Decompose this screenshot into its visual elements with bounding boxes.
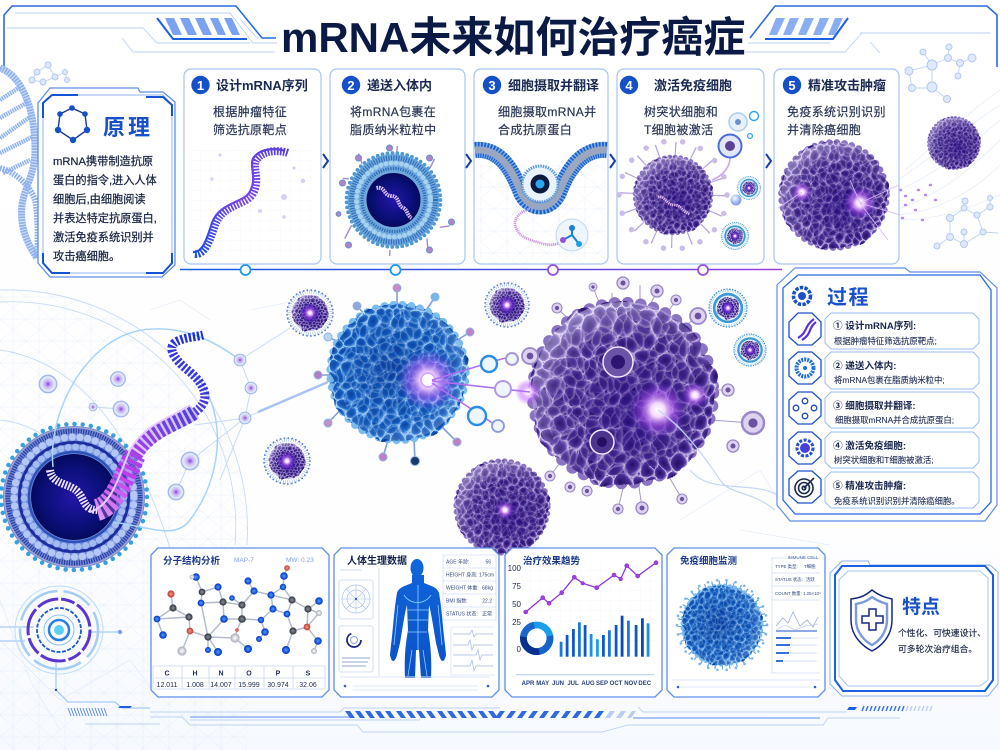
element table: 14.007 bbox=[210, 682, 232, 689]
text: principle description: mRNA携带制造抗原 bbox=[53, 154, 153, 168]
element table: 1.008 bbox=[186, 682, 204, 689]
text: principle description: 攻击癌细胞。 bbox=[53, 249, 120, 263]
target radar bbox=[0, 586, 150, 708]
molecule bbox=[154, 565, 323, 656]
element table: 32.06 bbox=[299, 682, 317, 689]
y axis labels: 50 bbox=[512, 600, 522, 609]
arrow bbox=[466, 154, 471, 168]
text: principle description: 并表达特定抗原蛋白, bbox=[53, 211, 157, 225]
human body figure bbox=[390, 559, 446, 678]
icon: cell membrane uptake bbox=[475, 150, 607, 251]
header frame right bbox=[745, 6, 997, 67]
step card 4 bbox=[617, 69, 764, 264]
step description: 细胞摄取mRNA并 bbox=[498, 104, 596, 119]
step description bbox=[498, 104, 596, 137]
month labels: APR bbox=[522, 681, 535, 687]
panel meta: MW: 0.23 bbox=[286, 557, 314, 564]
panel: features bbox=[830, 561, 998, 696]
heading: features: 特点 bbox=[902, 596, 940, 618]
line chart bbox=[524, 561, 658, 614]
text: principle description: 蛋白的指令,进入人体 bbox=[53, 173, 157, 187]
step description bbox=[213, 104, 287, 137]
blue immune cell bbox=[677, 580, 767, 670]
stats table: BMI 指数: bbox=[446, 598, 468, 604]
badge 4 bbox=[620, 76, 638, 94]
step heading: 设计mRNA序列 bbox=[216, 78, 308, 93]
month labels: SEP bbox=[596, 681, 608, 687]
title: mRNA未来如何治疗癌症 bbox=[281, 14, 745, 61]
panel: treatment trend bbox=[505, 548, 662, 697]
process row 5: ⑤ 精准攻击肿瘤: bbox=[833, 480, 906, 492]
stats table: WEIGHT 体重: bbox=[446, 584, 479, 592]
step heading: 细胞摄取并翻译 bbox=[508, 78, 599, 93]
month labels: JUL bbox=[567, 681, 579, 687]
big blue cell with spikes bbox=[314, 284, 530, 466]
step heading: 精准攻击肿瘤 bbox=[808, 78, 886, 93]
step description: 并清除癌细胞 bbox=[787, 122, 861, 137]
ecg box bbox=[451, 627, 495, 675]
big purple cancer cell bbox=[515, 277, 778, 514]
background lattice sphere bbox=[0, 290, 830, 750]
panel meta bbox=[234, 557, 314, 564]
month labels: AUG bbox=[581, 681, 595, 687]
footer tech lines bbox=[68, 706, 932, 732]
step description: 免疫系统识别识别 bbox=[787, 104, 886, 119]
text: features description: 可多轮次治疗组合。 bbox=[898, 643, 977, 654]
y axis labels bbox=[508, 564, 522, 654]
icon: dendritic cell bbox=[619, 141, 730, 249]
y axis labels: 0 bbox=[517, 645, 522, 654]
immune data table: COUNT 数量: bbox=[775, 590, 802, 597]
step description: 脂质纳米粒粒中 bbox=[350, 122, 436, 137]
stats table: 68kg bbox=[482, 586, 493, 592]
network dots bbox=[210, 153, 305, 219]
process row 3: 细胞摄取mRNA并合成抗原蛋白; bbox=[835, 415, 954, 425]
process row 2: 将mRNA包裹在脂质纳米粒中; bbox=[834, 375, 945, 385]
element table: C bbox=[164, 670, 170, 678]
immune data table bbox=[772, 555, 821, 673]
process row 2: ② 递送入体内: bbox=[833, 360, 896, 372]
icon: cancer cell under attack bbox=[778, 142, 900, 248]
process row 5 bbox=[789, 471, 979, 508]
process row 3: ③ 细胞摄取并翻译: bbox=[833, 400, 916, 412]
y axis labels: 25 bbox=[512, 618, 522, 627]
element table: P bbox=[276, 670, 281, 678]
element table: 12.011 bbox=[157, 682, 178, 689]
small virus cells bbox=[264, 283, 766, 484]
stats table: 正常 bbox=[482, 610, 492, 618]
badge 3 bbox=[483, 76, 501, 94]
stats table: HEIGHT 身高: bbox=[446, 572, 478, 578]
top left molecule bbox=[29, 62, 70, 85]
element table bbox=[153, 666, 325, 689]
panel: process bbox=[777, 268, 997, 521]
radar box bbox=[339, 568, 379, 676]
process row 1 bbox=[789, 313, 979, 349]
step card 5 bbox=[774, 69, 900, 264]
element table: 30.974 bbox=[267, 682, 289, 689]
step heading: 递送入体内 bbox=[367, 78, 432, 93]
attack beams bbox=[432, 358, 530, 428]
step description bbox=[350, 104, 436, 137]
icon: hexagon molecule bbox=[55, 105, 90, 143]
process row 1: 根据肿瘤特征筛选抗原靶点; bbox=[834, 336, 937, 346]
satellite immune cells bbox=[718, 112, 760, 250]
axis line bbox=[516, 674, 654, 676]
panel: principle bbox=[38, 88, 175, 277]
month labels: OCT bbox=[610, 681, 623, 687]
immune data table: IMMUNE CELL bbox=[788, 555, 819, 560]
timeline bbox=[180, 265, 782, 275]
badge 4: 4 bbox=[625, 78, 633, 93]
step description: 合成抗原蛋白 bbox=[498, 122, 572, 137]
badge 5: 5 bbox=[788, 78, 796, 93]
purple cell lower bbox=[455, 460, 549, 554]
heading: principle: 原理 bbox=[103, 115, 153, 140]
month labels: DEC bbox=[638, 681, 652, 687]
right molecules and strands bbox=[880, 44, 1000, 249]
arrow bbox=[323, 154, 328, 168]
network lines centre bbox=[93, 328, 328, 492]
gauge box bbox=[339, 626, 373, 672]
y axis labels: 100 bbox=[508, 564, 522, 573]
step description: T细胞被激活 bbox=[644, 123, 713, 137]
process row 5: 免疫系统识别识别并清除癌细胞。 bbox=[834, 496, 960, 506]
element table: S bbox=[306, 670, 311, 678]
text: principle description: 细胞后,由细胞阅读 bbox=[53, 192, 146, 206]
text: features description bbox=[898, 627, 986, 654]
month labels: MAY bbox=[536, 681, 549, 687]
element table: H bbox=[192, 670, 198, 678]
badge 5 bbox=[783, 76, 801, 94]
text: principle description: 激活免疫系统识别并 bbox=[53, 230, 154, 244]
purple satellites bbox=[522, 277, 764, 514]
lipid nanoparticle with mrna bbox=[1, 424, 147, 570]
immune data table: T细胞 bbox=[804, 563, 816, 570]
text: principle description bbox=[53, 154, 157, 263]
icon: gear bbox=[794, 288, 810, 304]
arrow bbox=[766, 154, 771, 168]
immune data table: STATUS 状态: bbox=[775, 576, 803, 582]
step description: 树突状细胞和 bbox=[644, 104, 718, 119]
badge 2: 2 bbox=[347, 78, 355, 93]
step description bbox=[787, 104, 886, 137]
donut chart bbox=[523, 625, 550, 652]
immune data table: TYPE 类型: bbox=[775, 563, 798, 570]
badge 2 bbox=[342, 76, 360, 94]
panel: molecular analysis bbox=[151, 548, 329, 697]
badge 1: 1 bbox=[197, 78, 204, 93]
text: features description: 个性化、可快速设计、 bbox=[898, 627, 986, 638]
element table: O bbox=[246, 670, 252, 678]
panel: body data bbox=[334, 548, 499, 697]
panel meta: MAP-7 bbox=[234, 557, 254, 564]
step heading: 激活免疫细胞 bbox=[654, 78, 732, 93]
heading: process: 过程 bbox=[827, 286, 870, 309]
step description: 根据肿瘤特征 bbox=[213, 104, 287, 119]
stats table: STATUS 状态: bbox=[446, 610, 478, 618]
panel heading: 人体生理数据 bbox=[347, 554, 407, 567]
process row 3 bbox=[789, 392, 979, 428]
network nodes bbox=[39, 354, 257, 500]
process row 2 bbox=[789, 352, 979, 389]
step card 2 bbox=[330, 69, 465, 264]
process row 1: ① 设计mRNA序列: bbox=[833, 320, 916, 332]
icon: shield bbox=[851, 590, 892, 651]
process row 4: 树突状细胞和T细胞被激活; bbox=[834, 455, 934, 465]
month labels: NOV bbox=[624, 681, 637, 687]
badge 1 bbox=[191, 76, 210, 94]
immune data table: 活跃 bbox=[806, 576, 815, 583]
header frame left bbox=[4, 6, 277, 68]
step description bbox=[644, 104, 718, 137]
month labels bbox=[522, 681, 652, 687]
arrow bbox=[610, 154, 615, 168]
mrna ribbon bbox=[50, 329, 240, 531]
element table: N bbox=[218, 670, 224, 678]
dna helix decoration bbox=[0, 68, 38, 258]
progress line bbox=[672, 680, 820, 688]
process row 4: ④ 激活免疫细胞: bbox=[833, 440, 906, 452]
process row 4 bbox=[789, 432, 979, 468]
bar chart bbox=[560, 616, 650, 657]
step description: 将mRNA包裹在 bbox=[350, 104, 436, 119]
small purple cell top right bbox=[928, 117, 980, 169]
stats table bbox=[443, 555, 496, 620]
progress line bbox=[340, 677, 490, 690]
icon: mrna ribbon bbox=[193, 149, 288, 254]
step description: 筛选抗原靶点 bbox=[213, 122, 287, 137]
panel heading: 免疫细胞监测 bbox=[680, 555, 737, 567]
step card 3 bbox=[474, 69, 608, 264]
step card 1 bbox=[184, 69, 321, 264]
month labels: JUN bbox=[552, 681, 564, 687]
element table: 15.999 bbox=[238, 682, 260, 689]
y axis labels: 75 bbox=[512, 582, 522, 591]
stats table: 22.2 bbox=[482, 598, 492, 604]
panel heading: 治疗效果趋势 bbox=[523, 555, 581, 567]
panel heading: 分子结构分析 bbox=[163, 555, 221, 567]
stats table: 56 bbox=[485, 560, 491, 566]
icon: lipid nanoparticle bbox=[336, 143, 455, 260]
immune data table: 1.25×10⁹ bbox=[803, 591, 821, 596]
panel: immune monitoring bbox=[667, 548, 825, 697]
stats table: AGE 年龄: bbox=[446, 558, 469, 566]
badge 3: 3 bbox=[488, 78, 496, 93]
stats table: 175cm bbox=[479, 572, 494, 578]
